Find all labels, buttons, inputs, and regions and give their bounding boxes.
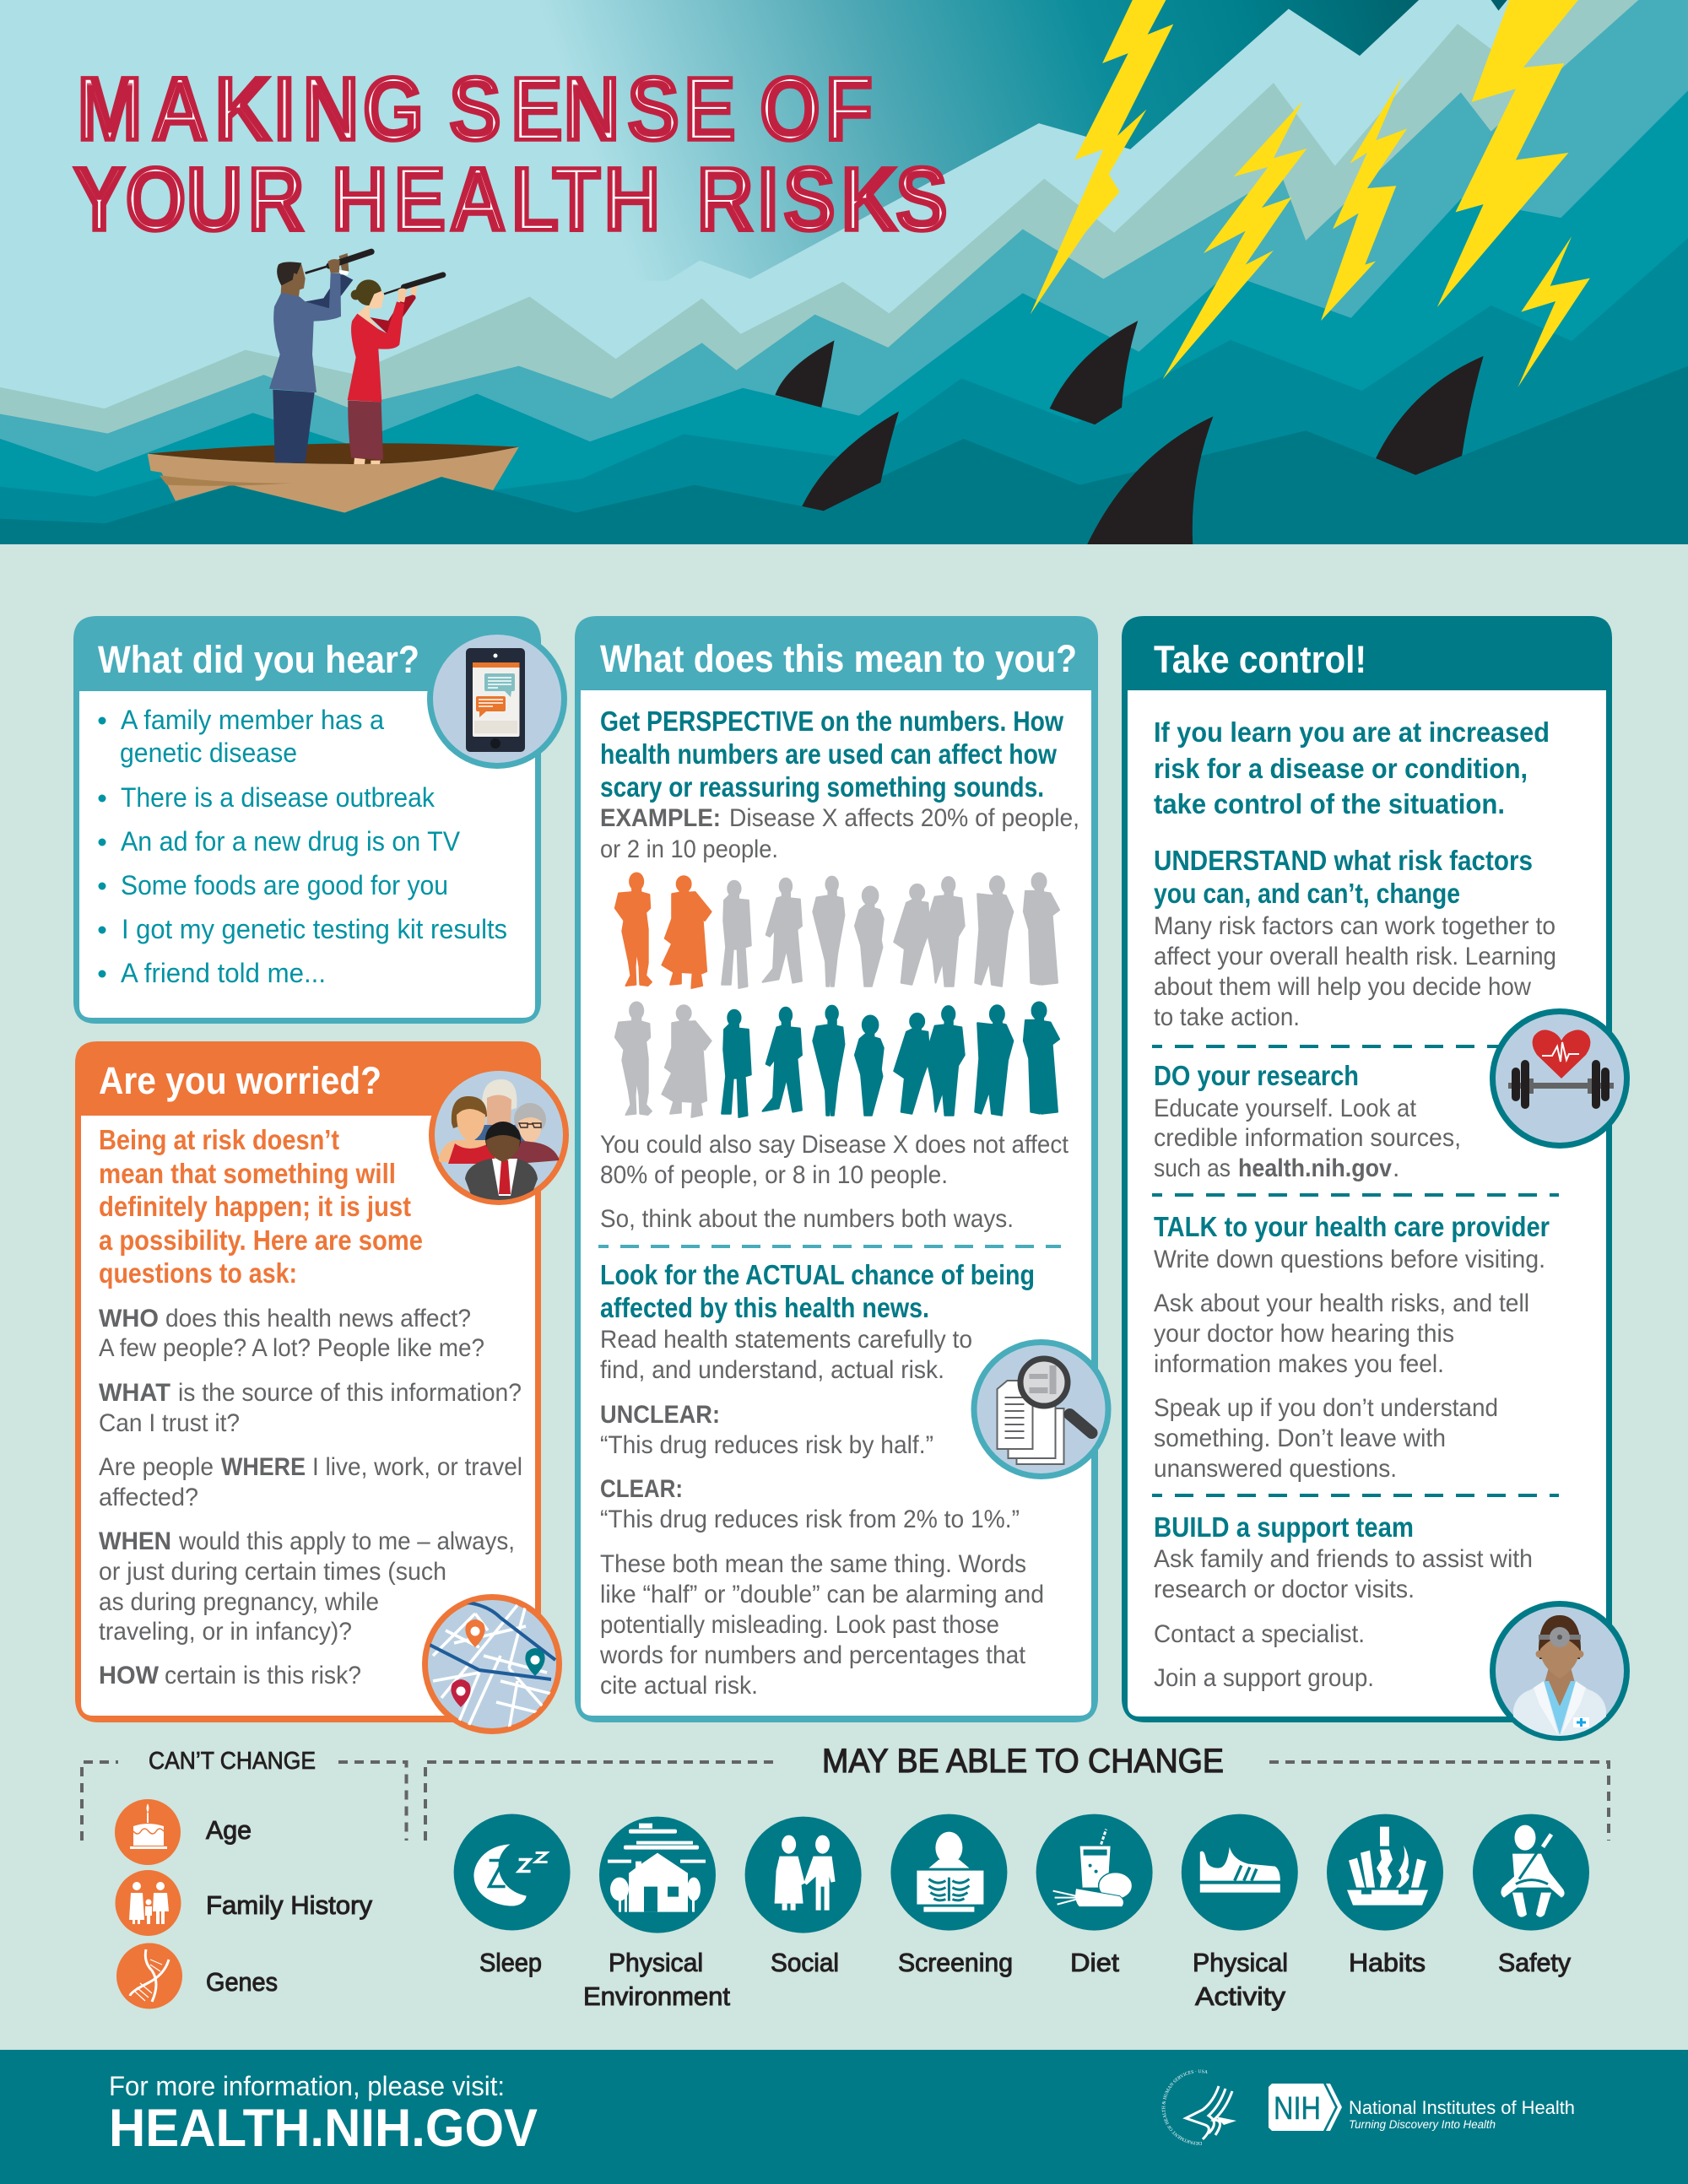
text: being at risk intro: mean that something will <box>99 1158 396 1189</box>
text: understand risk factors: you can, and can’t, change <box>1154 878 1460 909</box>
title: MAKING SENSE OF <box>77 58 874 159</box>
chart: 2 in 10 people, orange highlighted <box>615 873 1059 988</box>
factor: habits: Habits <box>1349 1948 1426 1977</box>
bracket: may be able to change <box>425 1743 1609 1841</box>
text: get perspective: EXAMPLE: <box>600 804 721 832</box>
factor: physical activity: Physical <box>1193 1948 1288 1977</box>
logo: NIH: NIH <box>1274 2091 1321 2127</box>
list: things you hear <box>98 705 507 988</box>
text: look for the actual chance: These both mean the same thing. Words <box>600 1550 1026 1578</box>
text: talk to your provider: your doctor how hearing this <box>1154 1320 1454 1348</box>
text: get perspective: Disease X affects 20% of people, <box>729 804 1079 832</box>
text: build a support team: Contact a specialist. <box>1154 1620 1365 1648</box>
list: things you hear: I got my genetic testing kit results <box>122 914 507 944</box>
icon: heart and barbell <box>1492 1011 1627 1146</box>
text: questions to ask: WHERE <box>221 1453 306 1481</box>
text: talk to your provider: Speak up if you don’t understand <box>1154 1394 1498 1422</box>
list: things you hear: There is a disease outbreak <box>121 782 436 813</box>
text: understand risk factors: to take action. <box>1154 1003 1300 1031</box>
text: questions to ask: certain is this risk? <box>165 1662 361 1689</box>
icon: lightning bolts <box>1031 0 1590 387</box>
text: do your research: . <box>1393 1154 1399 1182</box>
text: do your research: health.nih.gov <box>1238 1154 1392 1182</box>
text: numbers both ways: So, think about the numbers both ways. <box>600 1205 1014 1233</box>
icon: shark fins <box>775 321 1484 544</box>
text: questions to ask: affected? <box>99 1484 198 1511</box>
title: MAKING SENSE OF <box>77 58 874 159</box>
text: look for the actual chance: potentially misleading. Look past those <box>600 1611 999 1639</box>
panel: what does this mean to you <box>575 616 1108 1722</box>
text: understand risk factors: about them will help you decide how <box>1154 973 1531 1001</box>
text: talk to your provider: something. Don’t leave with <box>1154 1424 1446 1452</box>
chart: 8 in 10 people, teal highlighted <box>615 1002 1059 1117</box>
list: things you hear: A friend told me... <box>121 958 326 988</box>
text: numbers both ways: You could also say Disease X does not affect <box>600 1131 1069 1159</box>
text: build a support team: research or doctor visits. <box>1154 1576 1415 1603</box>
factor: sleep: Sleep <box>479 1948 542 1977</box>
text: being at risk intro: definitely happen; it is just <box>99 1191 411 1222</box>
factor: screening <box>890 1814 1013 1977</box>
icon: smartphone with message bubbles <box>430 631 564 766</box>
logo: HHS seal <box>1161 2069 1236 2145</box>
text: look for the actual chance: Look for the ACTUAL chance of being <box>600 1259 1035 1290</box>
text: look for the actual chance: cite actual risk. <box>600 1672 758 1700</box>
figures: two people with telescopes <box>269 251 443 464</box>
text: look for the actual chance: UNCLEAR: <box>600 1401 720 1429</box>
logo: HHS seal: DEPARTMENT OF HEALTH & HUMAN SERVICES · USA <box>1161 2069 1208 2145</box>
factor: safety: Safety <box>1498 1948 1571 1977</box>
text: get perspective: health numbers are used can affect how <box>600 738 1057 770</box>
panel: what did you hear <box>73 616 564 1024</box>
list: things you hear: An ad for a new drug is on TV <box>121 826 461 857</box>
text: questions to ask <box>99 1305 522 1689</box>
icon: doctor <box>1492 1603 1627 1738</box>
factor: diet <box>1036 1814 1153 1977</box>
text: questions to ask: would this apply to me – always, <box>178 1527 515 1555</box>
factor: safety <box>1473 1814 1589 1977</box>
icon: magnifying glass over documents <box>974 1342 1108 1477</box>
text: get perspective <box>600 705 1079 863</box>
text: questions to ask: traveling, or in infancy)? <box>99 1618 352 1646</box>
text: numbers both ways <box>600 1131 1069 1233</box>
text: look for the actual chance: affected by this health news. <box>600 1292 929 1323</box>
title <box>73 58 948 250</box>
factor: physical environment: Environment <box>583 1981 730 2011</box>
text: look for the actual chance: like “half” or ”double” can be alarming and <box>600 1581 1044 1608</box>
panel: are you worried <box>75 1041 565 1732</box>
list: things you hear: genetic disease <box>120 738 297 768</box>
factor: family history <box>115 1870 372 1936</box>
factor: physical activity: Activity <box>1195 1981 1286 2011</box>
text: questions to ask: Are people <box>99 1453 214 1481</box>
text: build a support team: Ask family and friends to assist with <box>1154 1545 1533 1573</box>
text: understand risk factors <box>1154 845 1556 1031</box>
text: questions to ask: I live, work, or travel <box>312 1453 522 1481</box>
factor: screening: Screening <box>898 1948 1013 1977</box>
factor: age <box>115 1799 252 1865</box>
text: talk to your provider: TALK to your health care provider <box>1154 1211 1550 1242</box>
text: look for the actual chance: find, and understand, actual risk. <box>600 1356 944 1384</box>
text: questions to ask: WHAT <box>99 1379 170 1407</box>
heading: take control: Take control! <box>1154 638 1366 681</box>
text: build a support team <box>1154 1511 1533 1692</box>
heading: are you worried: Are you worried? <box>99 1059 381 1102</box>
text: questions to ask: as during pregnancy, while <box>99 1588 379 1616</box>
factor: genes <box>116 1943 278 2008</box>
logo: NIH <box>1269 2084 1575 2131</box>
icon: city map with pins <box>425 1597 559 1732</box>
heading: can't change: CAN’T CHANGE <box>149 1748 316 1775</box>
heading: what did you hear: What did you hear? <box>98 638 419 681</box>
text: look for the actual chance: words for numbers and percentages that <box>599 1641 1026 1669</box>
text: web address: HEALTH.NIH.GOV <box>109 2099 538 2158</box>
factor: genes: Genes <box>206 1967 278 1997</box>
text: do your research: credible information sources, <box>1154 1124 1461 1152</box>
text: being at risk intro <box>99 1124 423 1289</box>
title: YOUR HEALTH RISKS <box>73 149 948 250</box>
factor: social <box>745 1817 862 1977</box>
logo: NIH: Turning Discovery Into Health <box>1349 2118 1496 2131</box>
icon: group of diverse people <box>432 1068 565 1202</box>
text: understand risk factors: UNDERSTAND what risk factors <box>1154 845 1533 876</box>
text: understand risk factors: affect your overall health risk. Learning <box>1154 943 1556 970</box>
text: questions to ask: or just during certain times (such <box>99 1558 446 1586</box>
bracket: can't change <box>82 1748 407 1841</box>
text: talk to your provider: Ask about your health risks, and tell <box>1154 1289 1529 1317</box>
text: being at risk intro: questions to ask: <box>99 1257 297 1289</box>
hero illustration: stormy sea <box>0 0 1688 544</box>
text: understand risk factors: Many risk factors can work together to <box>1154 912 1555 940</box>
heading: what does this mean: What does this mean to you? <box>600 637 1077 680</box>
title: YOUR HEALTH RISKS <box>73 149 948 250</box>
text: talk to your provider: Write down questions before visiting. <box>1154 1246 1545 1273</box>
text: being at risk intro: Being at risk doesn’t <box>99 1124 339 1155</box>
list: things you hear: A family member has a <box>121 705 384 735</box>
text: look for the actual chance: “This drug reduces risk from 2% to 1%.” <box>600 1506 1020 1533</box>
text: do your research: Educate yourself. Look at <box>1154 1095 1417 1122</box>
text: build a support team: Join a support group. <box>1154 1664 1374 1692</box>
text: take control intro: take control of the situation. <box>1154 788 1505 819</box>
factor: habits <box>1327 1814 1443 1977</box>
logo: NIH: National Institutes of Health <box>1349 2097 1575 2118</box>
text: questions to ask: does this health news affect? <box>165 1305 471 1333</box>
text: being at risk intro: a possibility. Here are some <box>99 1224 423 1256</box>
text: take control intro <box>1154 716 1550 819</box>
text: numbers both ways: 80% of people, or 8 in 10 people. <box>600 1161 948 1189</box>
text: talk to your provider: information makes you feel. <box>1154 1350 1444 1378</box>
text: look for the actual chance: “This drug reduces risk by half.” <box>600 1431 933 1459</box>
text: questions to ask: Can I trust it? <box>99 1409 240 1437</box>
panel: take control <box>1122 616 1627 1738</box>
factor: age: Age <box>206 1815 252 1845</box>
text: look for the actual chance: CLEAR: <box>600 1475 683 1503</box>
text: look for the actual chance: Read health statements carefully to <box>600 1326 972 1354</box>
text: questions to ask: A few people? A lot? People like me? <box>99 1334 484 1362</box>
icon: boat <box>148 443 519 513</box>
text: questions to ask: WHO <box>99 1305 159 1333</box>
factor: physical environment: Physical <box>609 1948 703 1977</box>
text: look for the actual chance <box>599 1259 1044 1700</box>
factor: physical activity <box>1182 1814 1298 2011</box>
factor: diet: Diet <box>1070 1948 1119 1977</box>
list: things you hear: Some foods are good for you <box>121 870 448 900</box>
factor: sleep <box>454 1814 571 1977</box>
text: questions to ask: is the source of this information? <box>178 1379 522 1407</box>
text: build a support team: BUILD a support team <box>1154 1511 1414 1543</box>
factor: family history: Family History <box>206 1890 372 1920</box>
text: for more information: For more information, please visit: <box>109 2071 505 2101</box>
text: get perspective: scary or reassuring something sounds. <box>600 771 1044 803</box>
text: get perspective: or 2 in 10 people. <box>600 835 778 863</box>
text: questions to ask: WHEN <box>99 1527 171 1555</box>
factor: physical environment <box>583 1817 730 2011</box>
footer <box>0 2050 1688 2184</box>
text: do your research <box>1154 1060 1461 1182</box>
text: do your research: such as <box>1154 1154 1231 1182</box>
text: talk to your provider: unanswered questions. <box>1154 1455 1397 1483</box>
text: talk to your provider <box>1154 1211 1550 1483</box>
text: do your research: DO your research <box>1154 1060 1359 1091</box>
text: take control intro: risk for a disease or condition, <box>1154 753 1528 784</box>
text: get perspective: Get PERSPECTIVE on the numbers. How <box>600 705 1063 737</box>
text: take control intro: If you learn you are at increased <box>1154 716 1550 748</box>
text: questions to ask: HOW <box>99 1662 160 1689</box>
factor: social: Social <box>771 1948 839 1977</box>
heading: may be able to change: MAY BE ABLE TO CHANGE <box>822 1743 1224 1780</box>
